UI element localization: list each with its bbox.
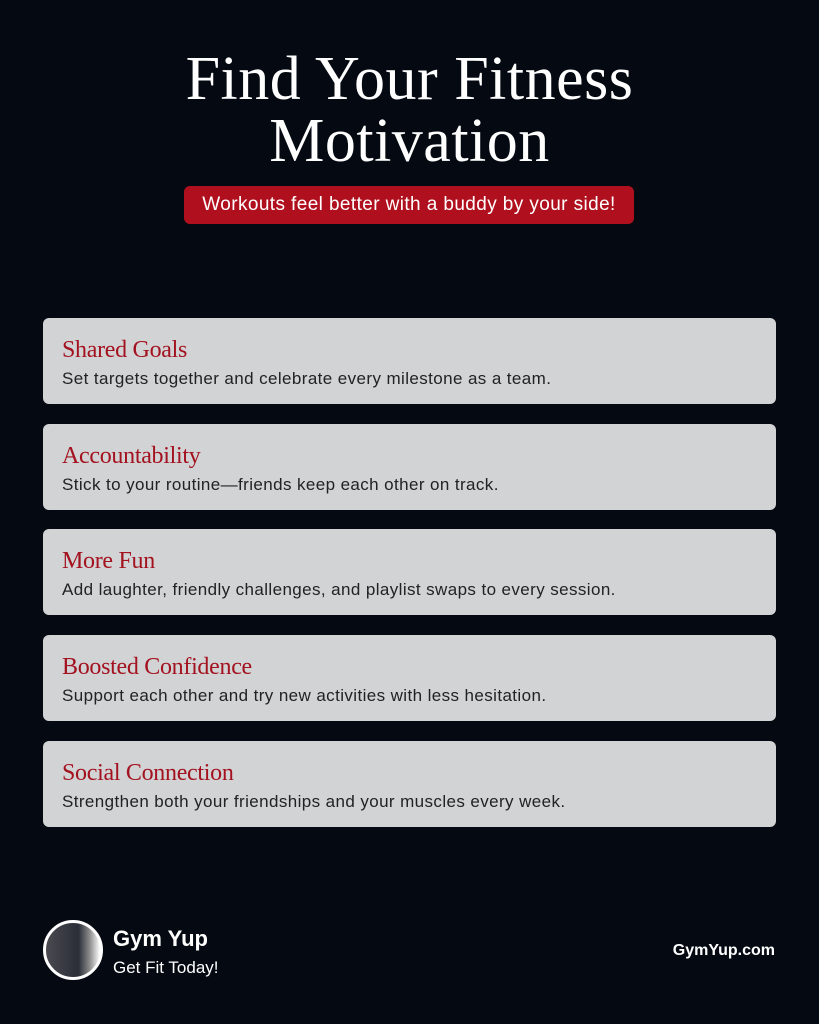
card: more fun: More Fun	[62, 548, 155, 574]
card: boosted confidence: Boosted Confidence	[62, 654, 252, 680]
card: accountability: Accountability	[62, 443, 200, 469]
footer url: GymYup.com	[673, 942, 775, 959]
card: social connection: Strengthen both your friendships and your muscles every week.	[62, 792, 566, 811]
card: social connection	[43, 741, 776, 827]
card: accountability: Stick to your routine—friends keep each other on track.	[62, 475, 499, 494]
title: Motivation	[269, 107, 550, 175]
card: more fun: Add laughter, friendly challenges, and playlist swaps to every session.	[62, 580, 616, 599]
card: more fun	[43, 529, 776, 615]
card: shared goals	[43, 318, 776, 404]
footer brand	[43, 920, 219, 980]
title: Find Your Fitness	[186, 45, 633, 113]
card: shared goals: Shared Goals	[62, 337, 187, 363]
card: social connection: Social Connection	[62, 760, 234, 786]
card: boosted confidence	[43, 635, 776, 721]
tagline: Get Fit Today!	[113, 958, 219, 977]
icon: avatar	[43, 920, 103, 980]
card: boosted confidence: Support each other and try new activities with less hesitation.	[62, 686, 546, 705]
brand name: Gym Yup	[113, 926, 208, 951]
subtitle pill: Workouts feel better with a buddy by your side!	[202, 194, 616, 215]
card: shared goals: Set targets together and celebrate every milestone as a team.	[62, 369, 551, 388]
title	[186, 45, 633, 175]
card: accountability	[43, 424, 776, 510]
subtitle pill	[184, 186, 634, 224]
